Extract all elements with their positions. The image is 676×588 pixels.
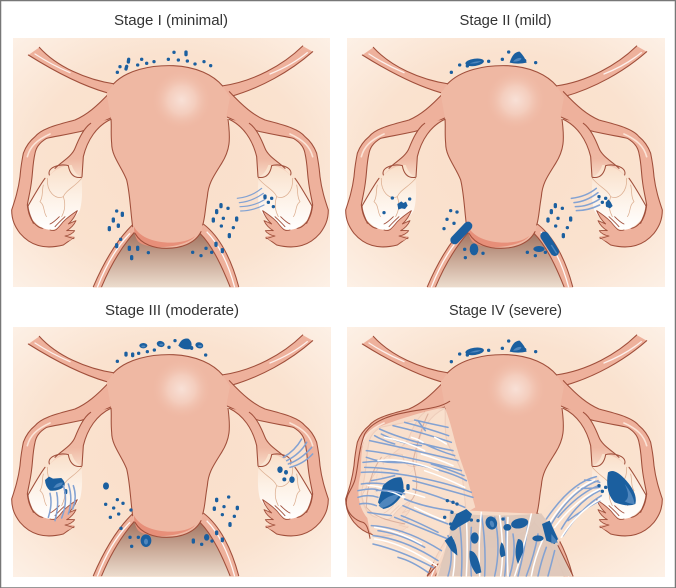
endometriosis implants and adhesions [346,341,636,576]
heading: Stage IV: Stage IV (severe) [449,303,562,319]
uterus anatomy [12,46,328,287]
adhesion strands, centre [448,514,555,576]
panel: Stage I (minimal) [12,13,330,287]
adhesion veils [358,407,603,576]
heading: Stage III: Stage III (moderate) [105,303,239,319]
heading: Stage I: Stage I (minimal) [114,13,228,29]
endometriosis implants and adhesions [45,338,313,547]
uterus anatomy [346,335,662,576]
panel background [347,327,665,577]
blue blobs [378,477,404,509]
heading: Stage II: Stage II (mild) [460,13,552,29]
endometriosis implants and adhesions [109,52,273,259]
panel background [13,327,331,577]
uterus anatomy [346,46,662,287]
panel: Stage IV (severe) [346,303,665,577]
adhesion strands, right [546,477,601,536]
panel: Stage II (mild) [346,13,665,287]
panel background [347,38,665,287]
endometriosis implants and adhesions [384,52,613,258]
panel background [13,38,330,287]
uterus anatomy [12,335,328,576]
panel: Stage III (moderate) [12,303,331,577]
adhesion strands, left [358,420,473,572]
